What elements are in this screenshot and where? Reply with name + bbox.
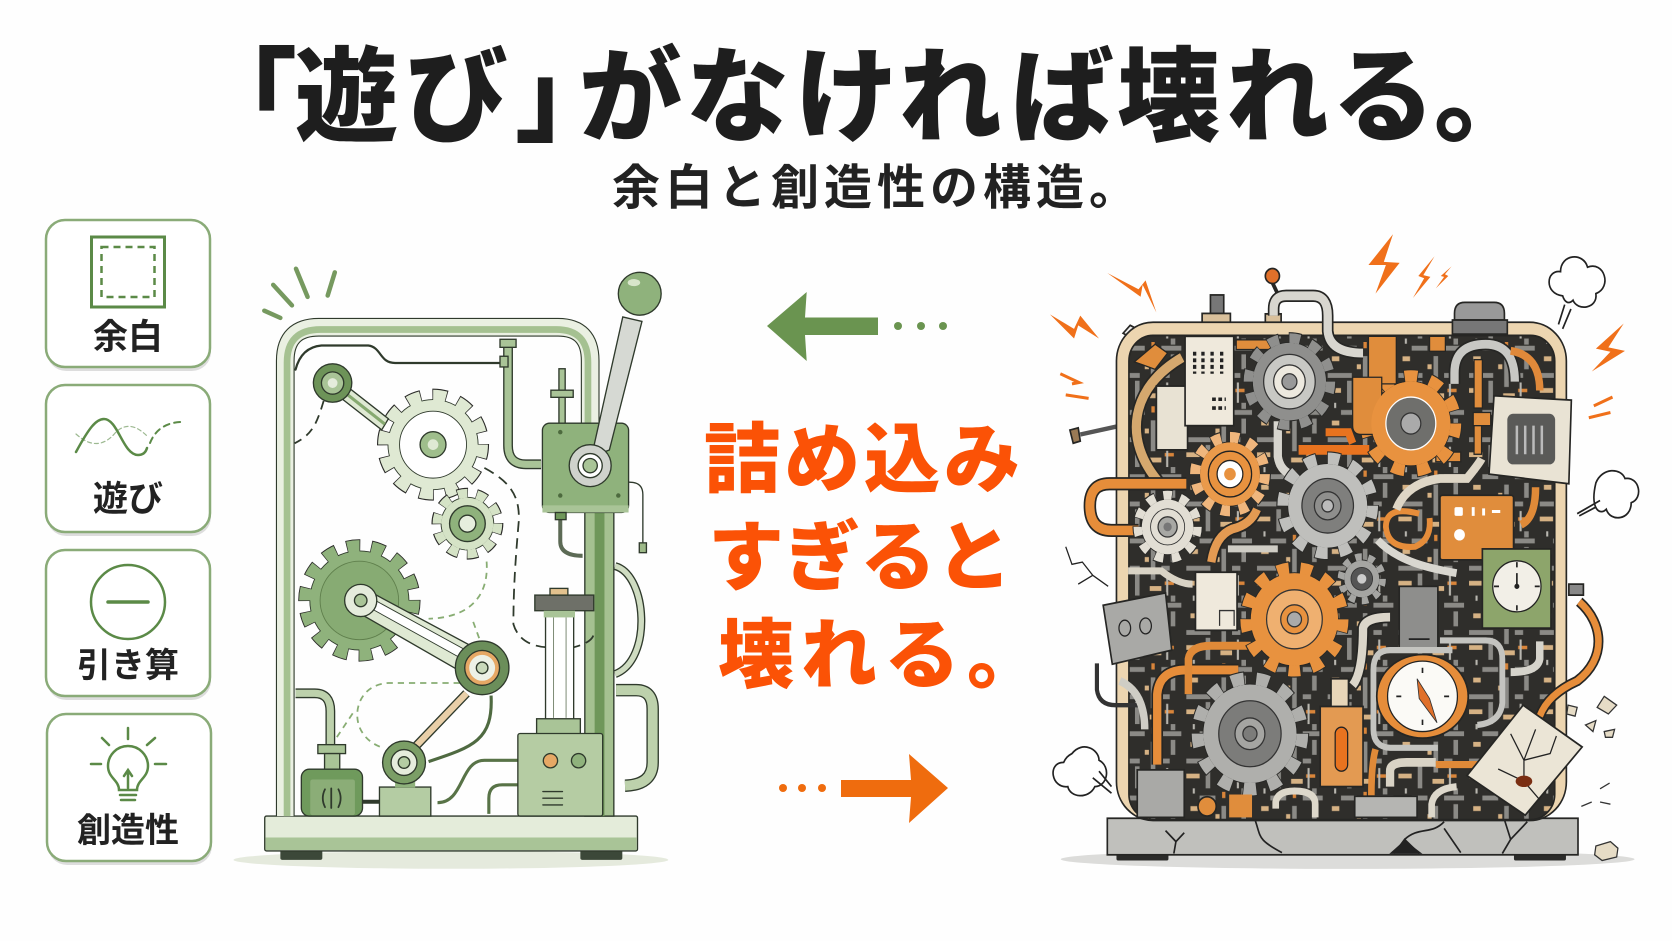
main message: すぎると xyxy=(708,516,1012,601)
drive pillar xyxy=(585,508,614,816)
card: 余白 xyxy=(46,220,211,371)
machine housing xyxy=(1116,322,1566,820)
belt arm: lower xyxy=(355,588,489,680)
hose to lower pulley xyxy=(429,696,491,762)
belt arm: upper xyxy=(330,379,388,430)
top grey fitting block xyxy=(1452,320,1507,334)
arrow: orange right xyxy=(779,754,948,823)
cream panels xyxy=(1156,336,1237,630)
gear hub overlay xyxy=(1371,382,1450,465)
control wire and elbow pipe xyxy=(296,339,541,464)
gear: small dark grey xyxy=(1341,557,1383,601)
debris xyxy=(1567,696,1618,861)
card: 遊び: 遊び xyxy=(93,480,163,519)
glass cylinder xyxy=(535,588,594,720)
gear: light grey centre xyxy=(1283,458,1373,553)
vent plate xyxy=(1489,396,1571,484)
linkage rod xyxy=(415,693,467,747)
pressure gauge xyxy=(1377,655,1468,738)
gear: orange small xyxy=(1195,437,1265,511)
gear: small xyxy=(437,493,498,554)
lightning bolts xyxy=(1050,234,1625,418)
gear: cream left xyxy=(1138,495,1198,559)
top stem xyxy=(551,369,573,423)
main message: 詰め込み xyxy=(704,418,1024,503)
card: 創造性: 創造性 xyxy=(77,812,179,850)
grey plate left xyxy=(1103,593,1172,664)
orange block behind gear xyxy=(1368,336,1396,384)
title: 「遊び」がなければ壊れる。 xyxy=(194,40,1537,155)
subtitle: 余白と創造性の構造。 xyxy=(612,162,1142,215)
lower pulley on block xyxy=(379,741,431,816)
card: 引き算 xyxy=(46,550,211,700)
ground shadow xyxy=(1061,850,1635,869)
frame pipe xyxy=(285,327,590,816)
pulley: hub on large gear xyxy=(345,584,377,617)
gear: large dark xyxy=(305,546,414,655)
gauge loop pipe xyxy=(1373,640,1502,748)
cream curved hose xyxy=(1136,357,1182,485)
gearbox xyxy=(542,423,629,520)
linkage rod fill xyxy=(415,693,467,747)
orange bracket xyxy=(1353,377,1382,434)
gear: grey top xyxy=(1248,338,1331,425)
machine base xyxy=(265,816,638,860)
steam cloud: right xyxy=(1577,471,1639,518)
orange block bottom xyxy=(1320,679,1363,787)
cracked base xyxy=(1107,818,1578,861)
top fittings xyxy=(1070,269,1583,595)
pulley: orange ring xyxy=(455,641,509,695)
orange pipes xyxy=(1090,421,1598,817)
control box xyxy=(438,719,603,816)
steam cloud: bottom left xyxy=(1053,747,1111,796)
main message xyxy=(704,418,1050,699)
dashed motion paths xyxy=(295,401,594,748)
illustration: overloaded orange machine xyxy=(1050,234,1639,869)
cracked cream panel xyxy=(1467,705,1582,815)
pulley: upper left xyxy=(313,364,352,402)
illustration: tidy green machine xyxy=(233,269,668,869)
steam cloud: top right xyxy=(1549,257,1605,329)
card: 遊び xyxy=(46,385,211,536)
side hoses xyxy=(560,482,653,786)
ground shadow xyxy=(233,851,668,869)
card: 引き算: 引き算 xyxy=(77,647,179,685)
card: 余白: 余白 xyxy=(93,318,163,357)
card: 創造性 xyxy=(47,714,212,865)
arrow: green left xyxy=(767,292,947,361)
crack lines left xyxy=(1066,547,1108,586)
orange switch box xyxy=(1440,495,1514,560)
orange fragments inside housing xyxy=(1134,336,1491,462)
gear: big orange xyxy=(1246,568,1343,671)
gear: light upper xyxy=(383,395,483,494)
lever xyxy=(569,272,661,487)
spark marks xyxy=(264,269,335,318)
main message: 壊れる。 xyxy=(718,614,1050,699)
cream curved hose fill xyxy=(1136,357,1182,485)
gear: orange top right xyxy=(1366,376,1456,471)
grey latch xyxy=(1399,586,1438,648)
top grey pipe xyxy=(1274,296,1540,390)
panel: keyword cards xyxy=(46,220,212,865)
bottle tank xyxy=(296,693,379,816)
small boxes bottom xyxy=(1137,770,1417,817)
gear: big grey xyxy=(1198,678,1302,789)
green gauge panel xyxy=(1482,549,1551,628)
